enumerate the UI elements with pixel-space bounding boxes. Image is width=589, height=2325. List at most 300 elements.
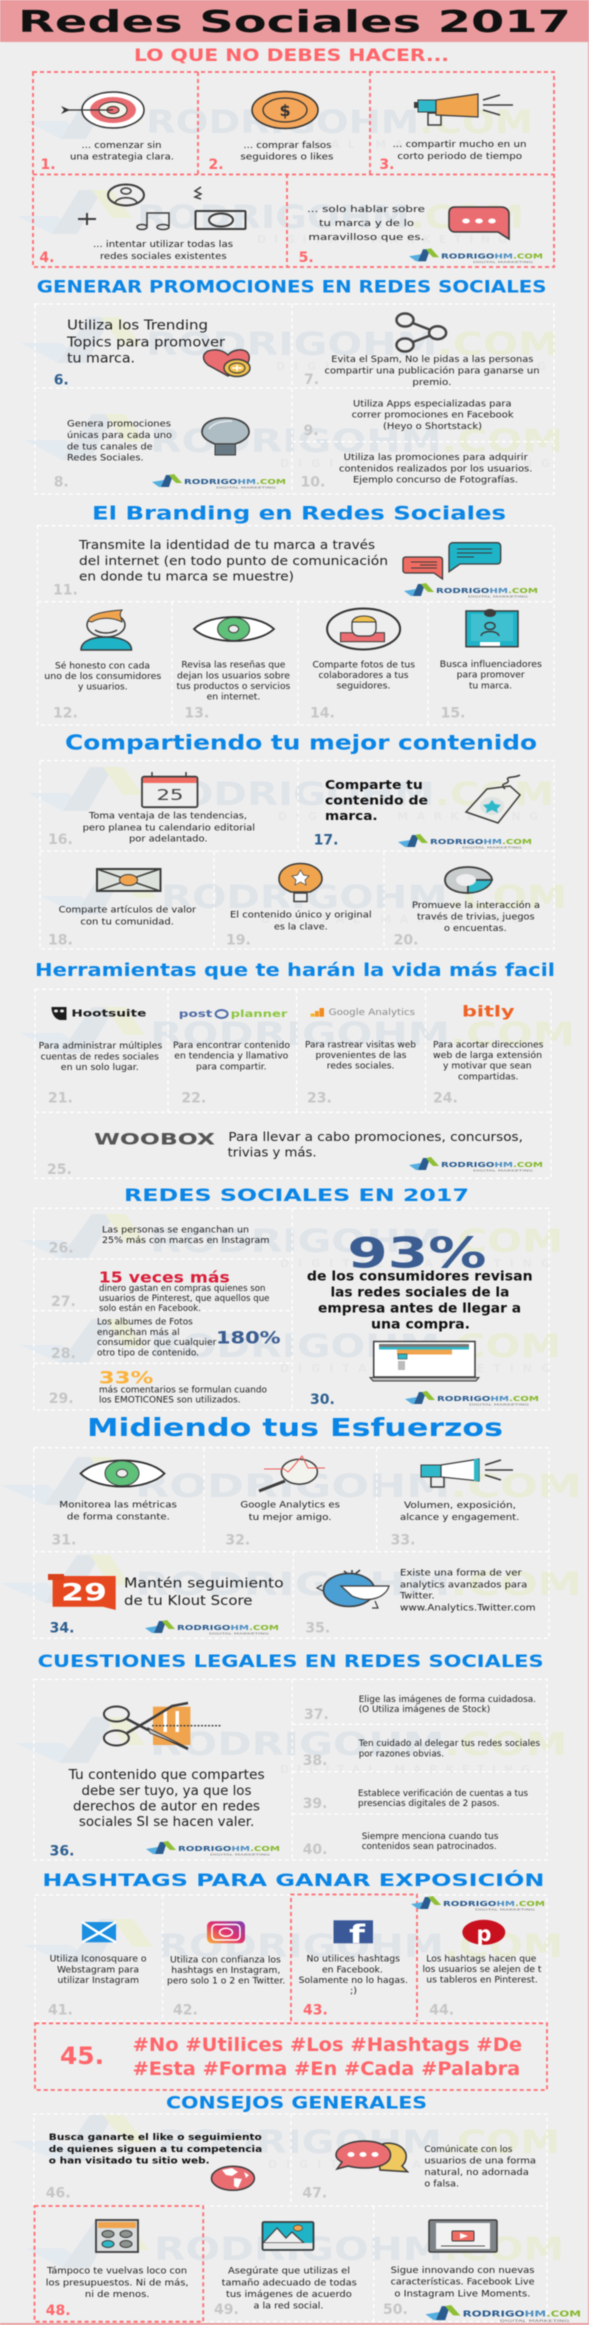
text: maravilloso que es.: [308, 233, 424, 243]
logo: RODRIGO HM .COM: [463, 2309, 581, 2319]
stat: 33%: [99, 1369, 153, 1389]
number: 38.: [303, 1753, 328, 1769]
section: compartiendo: [40, 730, 554, 949]
logo: RODRIGO HM .COM: [441, 1161, 543, 1169]
icon: magnifier: [259, 1456, 325, 1491]
text: Ejemplo concurso de Fotografías.: [353, 476, 518, 486]
text: Los albumes de Fotos: [97, 1317, 193, 1327]
text: compartidas.: [458, 1072, 518, 1082]
heading: HASHTAGS PARA GANAR EXPOSICIÓN: [42, 1871, 544, 1890]
panel: item 7: [304, 314, 540, 388]
text: través de trivias, juegos: [417, 912, 535, 923]
panel: item 25: [47, 1129, 543, 1178]
number: 20.: [394, 933, 418, 949]
number: 24.: [433, 1091, 458, 1107]
text: Establece verificación de cuentas a tus: [358, 1788, 528, 1799]
number: 39.: [303, 1796, 328, 1812]
text: RODRIGOHM .COM: [161, 878, 567, 916]
icon: light bulb: [202, 418, 249, 455]
text: Genera promociones: [67, 420, 171, 430]
number: 3.: [379, 157, 394, 173]
text: DIGITAL MARKETING: [278, 810, 538, 823]
text: [400, 1500, 519, 1523]
icon: chat bubble: [449, 207, 509, 239]
text: compartir una publicación para ganarse un: [324, 366, 540, 377]
text: [93, 240, 233, 262]
panel: item 40: [303, 1832, 499, 1858]
text: Los hashtags hacen que: [426, 1954, 537, 1964]
text: características. Facebook Live: [391, 2278, 535, 2288]
text: en tendencia y llamativo: [174, 1052, 289, 1062]
text: los usuarios se alejen de t: [422, 1965, 542, 1975]
heading: CUESTIONES LEGALES EN REDES SOCIALES: [38, 1652, 544, 1671]
text: corto periodo de tiempo: [397, 152, 523, 162]
number: 47.: [302, 2186, 327, 2202]
icon: megaphone: [421, 1459, 513, 1487]
number: 13.: [184, 705, 209, 721]
text: Elige las imágenes de forma cuidadosa.: [359, 1695, 536, 1705]
text: o Instagram Live Moments.: [394, 2289, 530, 2299]
icon: globe: [211, 2166, 254, 2190]
text: colaboradores a tus: [318, 671, 409, 681]
logo: RODRIGO HM .COM: [430, 838, 532, 846]
number: 48.: [46, 2303, 71, 2319]
text: RODRIGOHM .COM: [135, 1565, 582, 1603]
text: contenidos realizados por los usuarios.: [339, 464, 532, 474]
text: es la clave.: [274, 922, 328, 932]
icon: instagram: [207, 1921, 245, 1943]
text: [358, 1788, 528, 1809]
icon: megaphone: [414, 94, 513, 125]
text: tu marca y de lo: [319, 219, 415, 229]
text: en donde tu marca se muestre): [79, 569, 294, 584]
text: DIGITAL MARKETING: [280, 457, 550, 470]
text: El contenido único y original: [230, 911, 372, 921]
logo: DIGITAL MARKETING: [210, 1852, 271, 1856]
text: [176, 661, 291, 703]
text: DIGITAL MARKETING: [257, 233, 507, 246]
text: provenientes de las: [316, 1051, 407, 1061]
logo: RODRIGO HM .COM: [436, 587, 538, 595]
text: Comparte tu: [325, 778, 423, 792]
text: [66, 318, 226, 367]
panel: item 35: [305, 1569, 536, 1637]
text: tu marca.: [469, 681, 512, 691]
text: [307, 205, 426, 243]
text: ;): [350, 1987, 357, 1997]
text: [362, 1832, 499, 1852]
section: el branding: [38, 502, 554, 725]
icon: share: [396, 314, 446, 352]
number: 40.: [303, 1842, 328, 1858]
text: [99, 1284, 270, 1314]
icon: laptop: [370, 1342, 479, 1381]
text: Comúnicate con los: [424, 2145, 513, 2155]
panel: item 14: [310, 608, 415, 721]
logo: DIGITAL MARKETING: [462, 846, 523, 850]
number: 18.: [48, 933, 73, 949]
number: 19.: [226, 933, 251, 949]
icon: star bulb: [279, 864, 322, 902]
logo: [409, 1157, 543, 1172]
panel: item 4: [39, 184, 246, 266]
stat: 180%: [216, 1328, 281, 1348]
panel: item 45: [60, 2034, 522, 2080]
panel: item 26: [49, 1225, 269, 1256]
text: Para acortar direcciones: [433, 1040, 544, 1050]
panel: item 31: [52, 1460, 177, 1548]
logo: [145, 1620, 279, 1636]
text: us tableros en Pinterest.: [426, 1976, 538, 1986]
text: [102, 1225, 270, 1246]
text: Promueve la interacción a: [412, 900, 540, 911]
panel: item 3: [379, 94, 526, 173]
text: tamaño adecuado de todas: [222, 2278, 357, 2288]
text: los EMOTICONES son utilizados.: [99, 1396, 241, 1406]
number: 14.: [310, 705, 335, 721]
text: DIGITAL MARKETING: [280, 1763, 530, 1776]
heading: GENERAR PROMOCIONES EN REDES SOCIALES: [37, 277, 547, 296]
section: midiendo: [34, 1413, 549, 1638]
logo: RODRIGO HM .COM: [184, 478, 286, 486]
text: pero solo 1 o 2 en Twitter.: [167, 1977, 285, 1987]
heading: Midiendo tus Esfuerzos: [87, 1413, 503, 1442]
logo: [146, 1841, 280, 1856]
panel: item 2: [208, 92, 334, 173]
panel: item 27: [51, 1268, 270, 1314]
section: consejos generales: [34, 2094, 581, 2323]
text: Utiliza las promociones para adquirir: [344, 453, 528, 463]
text: solo están en Facebook.: [99, 1304, 201, 1314]
text: de forma constante.: [67, 1513, 170, 1523]
number: 9.: [304, 423, 319, 439]
panel: item 29: [49, 1369, 267, 1407]
text: [358, 1739, 540, 1760]
text: cuentas de redes sociales: [41, 1053, 159, 1063]
text: [97, 1317, 217, 1358]
logo: RODRIGO HM .COM: [178, 1845, 280, 1853]
text: [359, 1695, 536, 1715]
text: las redes sociales de la: [330, 1286, 509, 1301]
number: 50.: [383, 2302, 408, 2318]
text: con tu comunidad.: [80, 917, 174, 927]
number: 12.: [53, 705, 78, 721]
title banner: Redes Sociales 2017: [18, 5, 571, 40]
number: 32.: [225, 1532, 250, 1548]
text: otro tipo de contenido.: [97, 1348, 199, 1358]
text: [59, 906, 196, 927]
text: premio.: [412, 378, 451, 388]
panel: item 33: [391, 1459, 519, 1548]
text: RODRIGOHM .COM: [146, 103, 533, 141]
text: natural, no adornada: [424, 2168, 529, 2178]
panel: item 30: [307, 1228, 539, 1408]
text: (Heyo o Shortstack): [383, 422, 482, 432]
text: Transmite la identidad de tu marca a través: [78, 537, 375, 552]
text: Busca influenciadores: [440, 660, 542, 670]
text: o han visitado tu sitio web.: [49, 2157, 210, 2167]
text: una estrategia clara.: [70, 152, 174, 162]
text: Sé honesto con cada: [55, 660, 150, 671]
logo: RODRIGO HM .COM: [441, 252, 543, 260]
text: Monitorea las métricas: [59, 1500, 177, 1511]
text: Solamente no lo hagas.: [299, 1976, 408, 1986]
text: Asegúrate que utilizas el: [228, 2267, 350, 2277]
text: [312, 660, 415, 692]
logo: DIGITAL MARKETING: [468, 594, 529, 598]
panel: item 5: [299, 205, 543, 266]
panel: item 23: [305, 1008, 416, 1107]
icon: portrait: [327, 608, 400, 650]
text: [59, 1500, 177, 1523]
text: RODRIGOHM .COM: [158, 2123, 560, 2161]
panel: item 18: [48, 869, 196, 949]
hashtag text: #No #Utilices #Los #Hashtags #De: [133, 2034, 522, 2056]
text: [240, 141, 334, 162]
logo: RODRIGO HM .COM: [437, 1395, 539, 1403]
number: 46.: [46, 2186, 71, 2202]
number: 8.: [54, 475, 69, 491]
heading: Compartiendo tu mejor contenido: [65, 730, 537, 754]
text: Busca ganarte el like o seguimiento: [49, 2133, 262, 2143]
text: empresa antes de llegar a: [318, 1301, 521, 1316]
icon: klout score: 29: [61, 1579, 107, 1607]
section: hashtags: [35, 1871, 547, 2090]
panel: item 12: [44, 610, 162, 721]
logo: DIGITAL MARKETING: [216, 486, 277, 490]
number: 6.: [54, 373, 69, 389]
dashed frame: [35, 304, 554, 494]
dashed frame: [40, 761, 554, 949]
text: correr promociones en Facebook: [352, 411, 514, 421]
text: [124, 1577, 284, 1609]
number: 2.: [208, 157, 224, 173]
number: 35.: [305, 1621, 330, 1637]
text: [325, 778, 428, 823]
text: [173, 1041, 291, 1072]
text: [228, 1129, 523, 1160]
text: y usuarios.: [78, 683, 128, 693]
panel: item 49: [214, 2222, 357, 2318]
panel: item 37: [304, 1695, 536, 1723]
text: redes sociales existentes: [100, 252, 227, 262]
text: seguidores o likes: [240, 152, 334, 162]
panel: item 36: [50, 1703, 280, 1860]
panel: item 16: [48, 772, 255, 848]
text: [68, 1768, 265, 1830]
text: DIGITAL MARKETING: [276, 360, 546, 373]
text: tus productos o servicios: [176, 682, 291, 692]
text: uno de los consumidores: [44, 672, 162, 682]
icon: chat bubbles: [336, 2141, 408, 2172]
text: de los consumidores revisan: [307, 1270, 533, 1285]
number: 15.: [441, 705, 465, 721]
text: Las personas se enganchan un: [102, 1225, 249, 1235]
text: [67, 420, 173, 464]
text: [99, 1386, 267, 1406]
text: Google Analytics es: [240, 1501, 340, 1511]
text: por razones obvias.: [359, 1750, 444, 1760]
logo: DIGITAL MARKETING: [473, 1168, 534, 1172]
text: DIGITAL MARKETING: [256, 138, 516, 151]
text: [78, 537, 388, 584]
text: en internet.: [207, 693, 260, 703]
logo: [405, 1391, 539, 1406]
logo: RODRIGO HM .COM: [443, 1900, 545, 1908]
text: [70, 141, 174, 162]
hashtag text: #Esta #Forma #En #Cada #Palabra: [133, 2058, 520, 2080]
text: No utilices hashtags: [306, 1955, 400, 1965]
text: por adelantado.: [129, 835, 208, 845]
text: de quienes siguen a tu competencia: [49, 2145, 262, 2155]
text: RODRIGOHM .COM: [135, 1467, 582, 1505]
text: o falsa.: [424, 2179, 459, 2189]
icon: calculator: [96, 2220, 138, 2252]
panel: item 44: [422, 1920, 542, 2018]
number: 28.: [51, 1346, 76, 1362]
number: 42.: [173, 2002, 198, 2018]
logo: DIGITAL MARKETING: [500, 2319, 570, 2323]
number: 1.: [40, 157, 56, 173]
text: más comentarios se formulan cuando: [99, 1386, 267, 1396]
text: tu marca.: [67, 352, 135, 367]
logo: woobox: WOOBOX: [94, 1130, 216, 1149]
text: en Facebook.: [322, 1965, 383, 1975]
panel: item 43: [299, 1920, 408, 2018]
text: web de larga extensión: [433, 1050, 542, 1061]
number: 30.: [310, 1392, 335, 1408]
text: o encuentas.: [444, 924, 507, 934]
text: marca.: [325, 809, 378, 823]
heading: El Branding en Redes Sociales: [92, 502, 506, 524]
section: cuestiones legales: [34, 1652, 547, 1860]
panel: item 32: [225, 1456, 340, 1548]
text: [39, 1042, 163, 1073]
icon: heart with coin: [204, 350, 250, 376]
title banner: [0, 0, 589, 42]
text: Utiliza los Trending: [67, 318, 208, 333]
dashed frame: [35, 989, 551, 1178]
icon: picture: [262, 2222, 314, 2250]
text: ni de menos.: [85, 2290, 150, 2300]
section: generar promociones: [35, 277, 554, 494]
icon: calendar: 25: [156, 786, 184, 804]
panel: item 38: [303, 1739, 540, 1769]
icon: eye: [194, 617, 274, 641]
text: en un solo lugar.: [61, 1063, 139, 1073]
text: [339, 453, 532, 486]
text: [299, 1955, 408, 1997]
panel: item 6: [54, 318, 250, 389]
number: 29.: [49, 1391, 74, 1407]
number: 5.: [299, 250, 314, 266]
section: redes sociales en 2017: [34, 1186, 549, 1410]
text: pero planea tu calendario editorial: [83, 823, 255, 833]
number: 7.: [304, 372, 319, 388]
dashed frames: [34, 2114, 547, 2322]
logo: DIGITAL MARKETING: [469, 1402, 530, 1406]
logo: RODRIGO HM .COM: [177, 1624, 279, 1632]
logo: post planner: [179, 1009, 287, 1020]
text: de tus canales de: [67, 442, 153, 452]
text: utilizar Instagram: [58, 1976, 139, 1986]
panel: item 39: [303, 1788, 528, 1812]
logo: [404, 583, 538, 598]
text: Mantén seguimiento: [124, 1577, 284, 1592]
logo: [426, 2305, 581, 2323]
logo: DIGITAL MARKETING: [209, 1632, 270, 1636]
number: 45.: [60, 2042, 104, 2070]
text: [222, 2267, 357, 2311]
text: usuarios de Pinterest, que aquellos que: [99, 1294, 270, 1304]
dashed frame: [34, 1208, 549, 1410]
panel: item 47: [302, 2141, 536, 2202]
text: los presupuestos. Ni de más,: [46, 2278, 188, 2288]
icon: scissors: [104, 1703, 222, 1749]
text: RODRIGOHM .COM: [150, 1725, 567, 1763]
section: lo que no debes hacer: [33, 46, 554, 267]
panel: item 13: [176, 617, 291, 721]
panel: item 24: [433, 1003, 544, 1107]
text: [433, 1040, 544, 1082]
number: 43.: [303, 2002, 328, 2018]
text: [424, 2145, 536, 2189]
logo: post planner: post: [179, 1009, 212, 1020]
text: y motivar que sean: [443, 1062, 532, 1072]
panel: item 20: [394, 867, 540, 949]
text: Toma ventaja de las tendencias,: [88, 812, 247, 822]
text: Ten cuidado al delegar tus redes sociales: [358, 1739, 540, 1749]
text: ... solo hablar sobre: [307, 205, 426, 215]
panel: item 50: [383, 2220, 581, 2323]
number: 11.: [53, 583, 78, 599]
text: [324, 355, 540, 388]
text: Sigue innovando con nuevas: [391, 2266, 535, 2276]
text: derechos de autor en redes: [73, 1800, 260, 1815]
icon: pie chart: [445, 867, 492, 893]
stat: 93%: 93%: [347, 1228, 486, 1277]
number: 41.: [48, 2002, 73, 2018]
logo: DIGITAL MARKETING: [475, 1908, 536, 1912]
text: RODRIGOHM .COM: [150, 1327, 561, 1365]
dashed frame: [33, 72, 554, 267]
text: [46, 2267, 188, 2300]
logo: [411, 1896, 545, 1912]
text: del internet (en todo punto de comunicación: [79, 553, 388, 568]
panel: item 42: [167, 1921, 285, 2018]
text: tu mejor amigo.: [249, 1513, 332, 1523]
icon: video tablet: [429, 2220, 497, 2252]
number: 27.: [51, 1294, 76, 1310]
icon: bird: [317, 1570, 389, 1608]
heading: LO QUE NO DEBES HACER...: [134, 46, 449, 65]
icon: smiling person: [81, 610, 132, 650]
number: 16.: [48, 832, 73, 848]
panel: item 11: [53, 537, 538, 599]
text: [240, 1501, 340, 1523]
text: Siempre menciona cuando tus: [362, 1832, 499, 1842]
text: [412, 900, 540, 934]
text: a la red social.: [254, 2301, 324, 2311]
text: consumidor que cualquier: [97, 1338, 217, 1348]
text: Utiliza Apps especializadas para: [353, 399, 512, 409]
panel: item 8: [54, 418, 286, 491]
text: Topics para promover: [66, 335, 226, 350]
dashed frame: [38, 526, 554, 725]
text: [352, 399, 514, 432]
dashed frame: [34, 1448, 549, 1638]
text: DIGITAL MARKETING: [280, 1362, 550, 1375]
